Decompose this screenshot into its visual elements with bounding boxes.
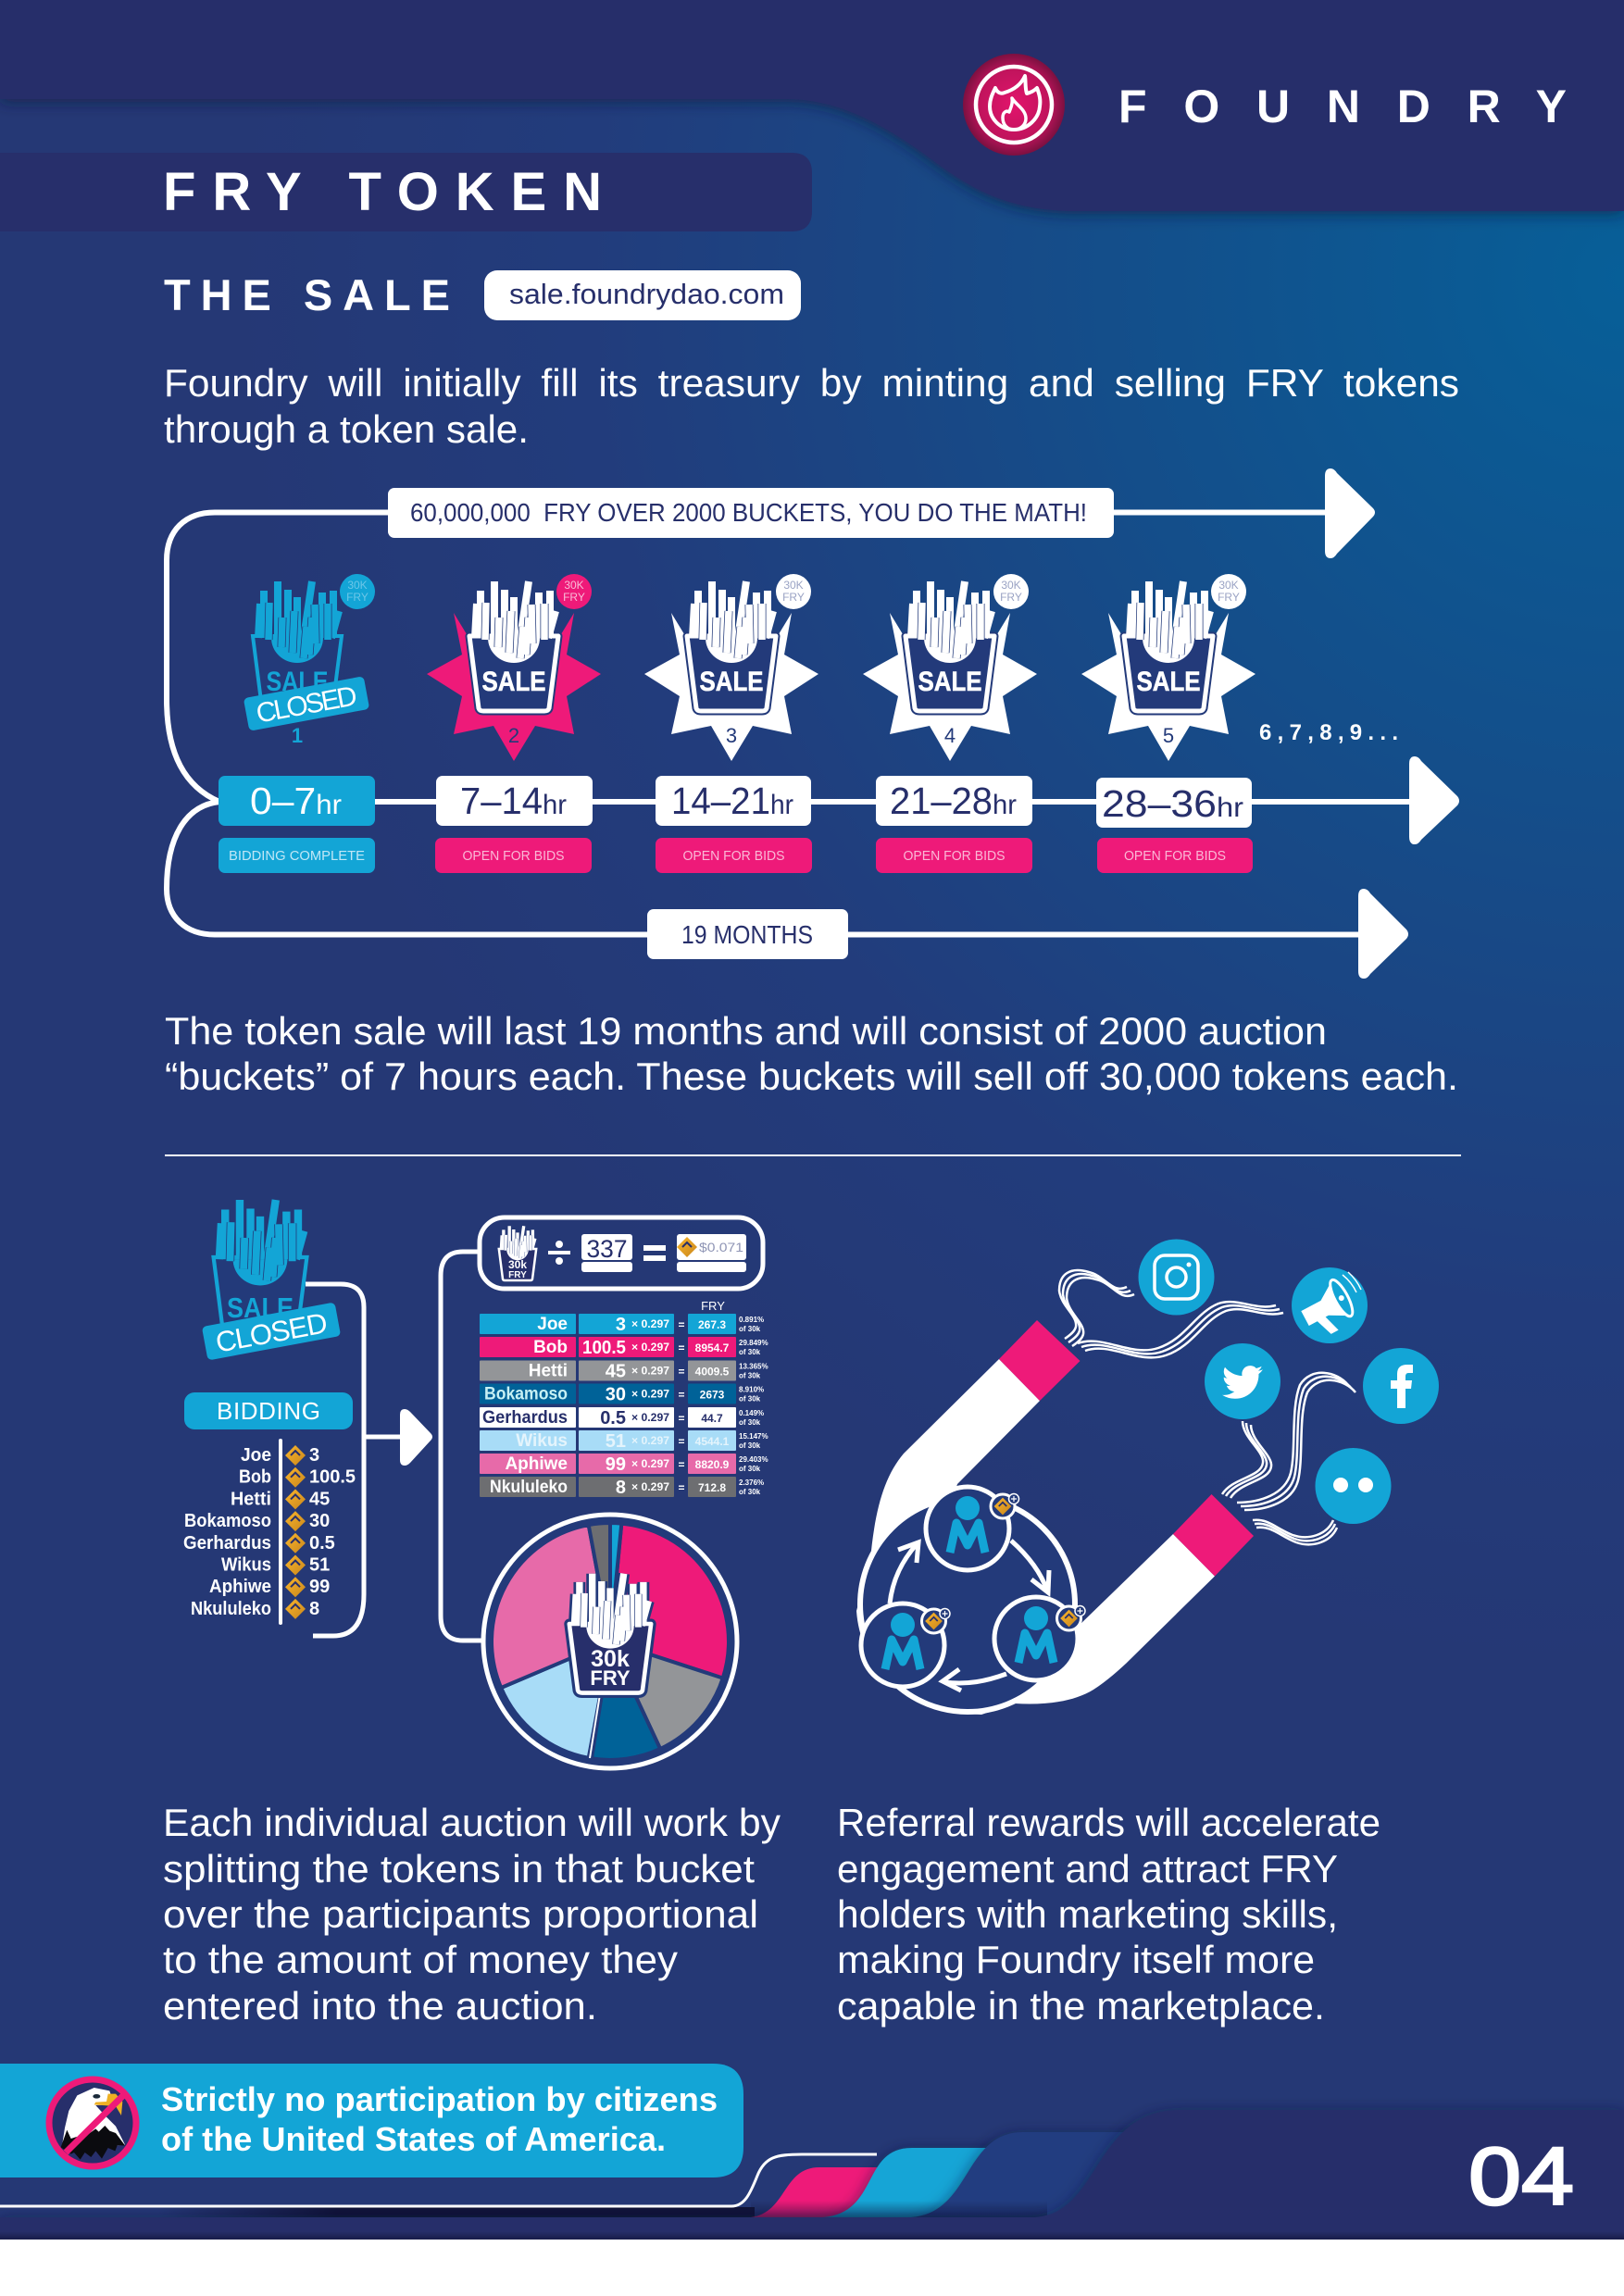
time box 0-7hr bbox=[219, 776, 375, 826]
bid list: 3 bbox=[309, 1445, 319, 1466]
closed fries icon: SALE bbox=[227, 1292, 294, 1324]
row Nkululeko: × 0.297 bbox=[631, 1480, 669, 1493]
status: open 4: OPEN FOR BIDS bbox=[904, 848, 1006, 864]
referral arrows bbox=[890, 1541, 1049, 1691]
time box 0-7hr: 0–7hr bbox=[250, 780, 342, 822]
status: open 5: OPEN FOR BIDS bbox=[1124, 848, 1226, 864]
bucket 3: open: SALE bbox=[700, 667, 763, 697]
row Gerhardus: 0.5 bbox=[600, 1408, 626, 1429]
row Bokamoso: 2673 bbox=[700, 1389, 725, 1402]
logo: Foundry flame bbox=[963, 54, 1065, 156]
row Joe: × 0.297 bbox=[631, 1317, 669, 1330]
time box 21-28hr: 21–28hr bbox=[890, 780, 1017, 822]
bid list bbox=[183, 1445, 356, 1619]
status: open 2: OPEN FOR BIDS bbox=[463, 848, 565, 864]
bucket 3: open: FRY bbox=[782, 591, 805, 604]
bid list: Joe bbox=[241, 1445, 271, 1466]
paragraph: token sale length: The token sale will last 19 months and will consist of 2000 auction bbox=[165, 1009, 1327, 1053]
pill: 60,000,000 FRY bbox=[388, 488, 1114, 538]
pill: 19 months: 19 MONTHS bbox=[681, 920, 813, 949]
row Gerhardus bbox=[480, 1407, 764, 1429]
row Gerhardus: Gerhardus bbox=[482, 1408, 568, 1428]
bucket 3: open bbox=[644, 574, 818, 761]
footer wave: pink bbox=[751, 2167, 926, 2217]
member top bbox=[926, 1487, 1009, 1570]
row Wikus: = bbox=[678, 1435, 685, 1448]
paragraph: referral rewards: making Foundry itself more bbox=[837, 1938, 1315, 1981]
bucket 1: closed: 30K bbox=[347, 579, 368, 592]
icon: flickr bbox=[1315, 1448, 1391, 1524]
row Aphiwe: of 30k bbox=[739, 1465, 761, 1473]
row Nkululeko: Nkululeko bbox=[490, 1478, 568, 1497]
bid list: 51 bbox=[309, 1555, 330, 1576]
row Bob: of 30k bbox=[739, 1348, 761, 1356]
row Wikus bbox=[480, 1430, 768, 1452]
bucket 2: open: 2 bbox=[508, 724, 519, 747]
notice text bbox=[161, 2080, 718, 2158]
status: bidding complete: BIDDING COMPLETE bbox=[229, 848, 365, 864]
row Bokamoso: 8.910% bbox=[739, 1385, 764, 1394]
time box 7-14hr: 7–14hr bbox=[460, 780, 567, 822]
paragraph: referral rewards: holders with marketing skills, bbox=[837, 1892, 1338, 1936]
time box 7-14hr bbox=[436, 776, 593, 826]
bucket 3: open: 30K bbox=[783, 579, 804, 592]
paragraph: referral rewards: capable in the marketplace. bbox=[837, 1984, 1325, 2028]
bid list: Gerhardus bbox=[183, 1533, 271, 1554]
row Wikus: 51 bbox=[606, 1431, 626, 1452]
bucket 4: open bbox=[863, 574, 1037, 761]
time box 21-28hr bbox=[876, 776, 1032, 826]
row Nkululeko: 712.8 bbox=[698, 1481, 726, 1494]
allocation table: FRY bbox=[701, 1299, 725, 1313]
intro paragraph: through a token sale. bbox=[164, 407, 529, 451]
status: open 3: OPEN FOR BIDS bbox=[683, 848, 785, 864]
bucket 1: closed: FRY bbox=[346, 591, 369, 604]
row Aphiwe bbox=[480, 1454, 768, 1475]
magnet pole bottom bbox=[1173, 1494, 1254, 1576]
row Joe: Joe bbox=[537, 1315, 568, 1334]
bucket 3: open: 3 bbox=[726, 724, 737, 747]
time box 28-36hr: 28–36 hr bbox=[1102, 782, 1243, 825]
referral ring bbox=[860, 1497, 1075, 1712]
row Joe: 3 bbox=[616, 1315, 626, 1335]
bid list: Hetti bbox=[231, 1489, 271, 1509]
divide sign bbox=[548, 1241, 570, 1265]
row Hetti: of 30k bbox=[739, 1372, 761, 1379]
row Hetti: 13.365% bbox=[739, 1363, 768, 1370]
337 box: 337 bbox=[587, 1235, 628, 1263]
allocation table bbox=[480, 1299, 768, 1498]
row Bob: Bob bbox=[533, 1338, 568, 1357]
section bar: FRY TOKEN bbox=[0, 153, 812, 231]
footer wave: blue bbox=[911, 2132, 1204, 2217]
row Bob: = bbox=[678, 1341, 685, 1354]
center fries icon: FRY bbox=[590, 1666, 631, 1690]
bottom arrow bbox=[167, 802, 1408, 979]
icon: instagram bbox=[1139, 1239, 1215, 1315]
paragraph: referral rewards: Referral rewards will accelerate bbox=[837, 1801, 1380, 1844]
bucket 4: open: SALE bbox=[918, 667, 981, 697]
small fries icon: FRY bbox=[508, 1270, 527, 1280]
status: open 5 bbox=[1097, 838, 1253, 873]
row Nkululeko: 8 bbox=[616, 1478, 626, 1498]
connector from formula to pie bbox=[441, 1252, 482, 1641]
bucket 5: open: SALE bbox=[1137, 667, 1200, 697]
bid list: 45 bbox=[309, 1489, 330, 1509]
url pill: sale.foundrydao.com bbox=[509, 278, 784, 310]
attraction waves bbox=[1059, 1270, 1355, 1544]
row Bokamoso bbox=[480, 1383, 764, 1405]
row Joe: 267.3 bbox=[698, 1318, 726, 1331]
row Gerhardus: 44.7 bbox=[701, 1412, 723, 1425]
337 box bbox=[581, 1234, 632, 1272]
row Aphiwe: 99 bbox=[606, 1454, 626, 1475]
bracket bbox=[306, 1284, 364, 1636]
row Bokamoso: of 30k bbox=[739, 1394, 761, 1404]
url pill bbox=[484, 270, 801, 320]
row Bokamoso: 30 bbox=[606, 1385, 626, 1405]
paragraph: auction mechanics: entered into the auction. bbox=[163, 1984, 597, 2028]
row Aphiwe: 29.403% bbox=[739, 1455, 768, 1464]
row Bob: 29.849% bbox=[739, 1339, 768, 1347]
bucket 1: closed: 1 bbox=[292, 724, 303, 747]
row Hetti: Hetti bbox=[529, 1361, 568, 1381]
center fries icon bbox=[569, 1574, 651, 1693]
result box bbox=[677, 1234, 746, 1272]
bid list: 30 bbox=[309, 1511, 330, 1531]
icon: megaphone bbox=[1292, 1267, 1368, 1343]
bid list: Nkululeko bbox=[191, 1599, 271, 1619]
paragraph: token sale length: “buckets” of 7 hours each. These buckets will sell off 30,000 tokens each. bbox=[165, 1054, 1458, 1098]
small fries icon bbox=[499, 1226, 536, 1280]
row Hetti: 45 bbox=[606, 1361, 626, 1381]
bid list: 0.5 bbox=[309, 1533, 335, 1554]
more buckets label: 6,7,8,9... bbox=[1259, 720, 1398, 745]
formula box bbox=[480, 1217, 763, 1289]
row Bob: 100.5 bbox=[582, 1338, 626, 1358]
small fries icon: 30k bbox=[508, 1258, 527, 1271]
row Hetti: × 0.297 bbox=[631, 1365, 669, 1378]
row Gerhardus: × 0.297 bbox=[631, 1411, 669, 1424]
bid list: Bokamoso bbox=[184, 1511, 271, 1531]
row Bob: × 0.297 bbox=[631, 1341, 669, 1354]
center fries icon: 30k bbox=[591, 1646, 630, 1672]
footer wave: cyan bbox=[823, 2148, 1037, 2217]
row Joe: = bbox=[678, 1318, 685, 1331]
top arrow bbox=[167, 468, 1375, 802]
notice text: Strictly no participation by citizens bbox=[161, 2080, 718, 2118]
icon: twitter bbox=[1205, 1343, 1280, 1419]
row Joe: of 30k bbox=[739, 1325, 761, 1333]
row Wikus: 4544.1 bbox=[695, 1435, 730, 1448]
row Joe: 0.891% bbox=[739, 1316, 764, 1324]
section bar: FRY TOKEN: FRY TOKEN bbox=[163, 162, 602, 222]
wordmark: FOUNDRY bbox=[1118, 81, 1567, 132]
row Bokamoso: = bbox=[678, 1389, 685, 1402]
intro paragraph: Foundry will initially fill its treasury by minting and selling FRY tokens bbox=[164, 361, 1459, 405]
time box 14-21hr bbox=[656, 776, 811, 826]
paragraph: token sale length bbox=[165, 1009, 1458, 1098]
paragraph: auction mechanics bbox=[163, 1801, 781, 2028]
member left bbox=[861, 1603, 944, 1687]
bucket 5: open: FRY bbox=[1218, 591, 1240, 604]
bid list: 100.5 bbox=[309, 1467, 356, 1488]
icon: barred eagle bbox=[49, 2079, 136, 2166]
middle arrow bbox=[370, 756, 1459, 844]
row Aphiwe: 8820.9 bbox=[695, 1458, 730, 1471]
equals sign bbox=[643, 1245, 666, 1261]
header band bbox=[0, 0, 1624, 211]
row Bokamoso: Bokamoso bbox=[484, 1385, 568, 1404]
row Wikus: Wikus bbox=[516, 1431, 568, 1451]
magnet pole top bbox=[999, 1320, 1080, 1401]
bid list: Wikus bbox=[221, 1555, 271, 1576]
bidding pill bbox=[184, 1392, 353, 1429]
closed fries icon: CLOSED bbox=[213, 1306, 330, 1359]
row Wikus: × 0.297 bbox=[631, 1434, 669, 1447]
bucket 2: open: SALE bbox=[481, 667, 546, 697]
footer wave: dark page tab bbox=[0, 2110, 1624, 2240]
icon: facebook bbox=[1363, 1348, 1439, 1424]
paragraph: auction mechanics: over the participants proportional bbox=[163, 1892, 758, 1936]
row Bokamoso: × 0.297 bbox=[631, 1387, 669, 1400]
paragraph: auction mechanics: Each individual auction will work by bbox=[163, 1801, 781, 1844]
row Hetti bbox=[480, 1361, 768, 1381]
arrow to formula bbox=[364, 1409, 432, 1466]
pie chart bbox=[483, 1515, 737, 1768]
row Gerhardus: 0.149% bbox=[739, 1409, 764, 1417]
row Aphiwe: Aphiwe bbox=[505, 1454, 568, 1474]
row Hetti: = bbox=[678, 1365, 685, 1378]
row Nkululeko: = bbox=[678, 1481, 685, 1494]
row Gerhardus: of 30k bbox=[739, 1418, 761, 1427]
magnet illustration bbox=[856, 1320, 1254, 1715]
bucket 2: open: 30K bbox=[564, 579, 584, 592]
bucket 1: closed bbox=[244, 574, 375, 747]
row Wikus: 15.147% bbox=[739, 1432, 768, 1441]
token badges bbox=[922, 1494, 1085, 1633]
result box: $0.071 bbox=[699, 1240, 743, 1254]
footer band bbox=[0, 2110, 1624, 2296]
paragraph: auction mechanics: splitting the tokens in that bucket bbox=[163, 1847, 755, 1890]
row Aphiwe: × 0.297 bbox=[631, 1457, 669, 1470]
paragraph: referral rewards bbox=[837, 1801, 1380, 2028]
heading: THE SALE: THE SALE bbox=[164, 270, 450, 319]
bucket 1: closed: CLOSED bbox=[254, 680, 359, 730]
bucket 4: open: FRY bbox=[1000, 591, 1022, 604]
status: open 2 bbox=[435, 838, 592, 873]
page number: 04 bbox=[1468, 2130, 1574, 2222]
paragraph: referral rewards: engagement and attract FRY bbox=[837, 1847, 1338, 1890]
pill: 60,000,000 FRY: 60,000,000 FRY OVER 2000 BUCKETS, YOU DO THE MATH! bbox=[410, 498, 1087, 527]
row Joe bbox=[480, 1314, 764, 1335]
bucket 2: open bbox=[427, 574, 601, 761]
pill: 19 months bbox=[647, 909, 848, 959]
notice text: of the United States of America. bbox=[161, 2120, 666, 2158]
bid list: Aphiwe bbox=[209, 1577, 271, 1597]
status: open 4 bbox=[876, 838, 1032, 873]
bidding pill: BIDDING bbox=[217, 1397, 320, 1425]
magnet body bbox=[856, 1359, 1215, 1715]
row Wikus: of 30k bbox=[739, 1441, 761, 1450]
bucket 5: open bbox=[1081, 574, 1255, 761]
bucket 5: open: 30K bbox=[1218, 579, 1239, 592]
time box 14-21hr: 14–21hr bbox=[671, 780, 793, 822]
row Hetti: 4009.5 bbox=[695, 1365, 730, 1378]
bucket 4: open: 30K bbox=[1001, 579, 1021, 592]
bid list: 99 bbox=[309, 1577, 330, 1597]
bucket 1: closed: SALE bbox=[267, 667, 328, 697]
row Bob bbox=[480, 1337, 768, 1358]
closed fries icon bbox=[202, 1200, 341, 1361]
paragraph: auction mechanics: to the amount of money they bbox=[163, 1938, 678, 1981]
intro paragraph bbox=[164, 361, 1459, 451]
status: bidding complete bbox=[219, 838, 375, 873]
bid list: Bob bbox=[239, 1467, 271, 1488]
bucket 5: open: 5 bbox=[1163, 724, 1174, 747]
bucket 4: open: 4 bbox=[944, 724, 956, 747]
bid list: 8 bbox=[309, 1599, 319, 1619]
row Nkululeko: of 30k bbox=[739, 1488, 761, 1496]
bucket 2: open: FRY bbox=[563, 591, 585, 604]
status: open 3 bbox=[656, 838, 812, 873]
row Aphiwe: = bbox=[678, 1458, 685, 1471]
bidding panel bbox=[183, 1200, 432, 1636]
timeline diagram bbox=[167, 468, 1459, 979]
member right bbox=[994, 1597, 1078, 1680]
row Gerhardus: = bbox=[678, 1412, 685, 1425]
row Nkululeko bbox=[480, 1477, 764, 1498]
notice banner bbox=[0, 2064, 743, 2177]
row Nkululeko: 2.376% bbox=[739, 1479, 764, 1487]
row Bob: 8954.7 bbox=[695, 1341, 730, 1354]
